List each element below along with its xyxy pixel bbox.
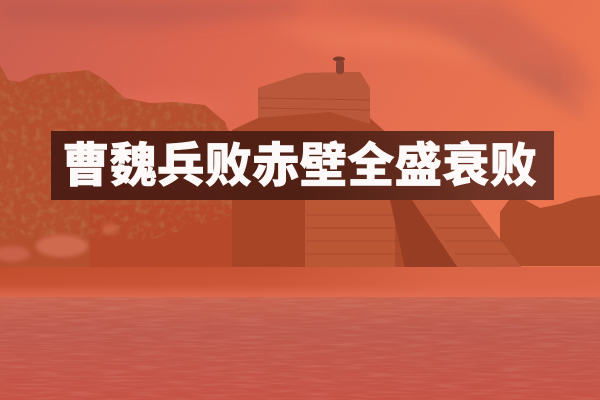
rocks on the shore	[0, 224, 118, 262]
tree line right	[500, 195, 600, 266]
shoreline mist	[0, 267, 600, 298]
figure on temple top	[333, 56, 345, 74]
pyramid temple	[232, 72, 522, 268]
sky	[0, 0, 600, 290]
title: 曹魏兵败赤壁全盛衰败	[62, 127, 537, 196]
title banner	[51, 131, 554, 200]
water	[0, 297, 600, 400]
tree line left	[0, 65, 232, 267]
